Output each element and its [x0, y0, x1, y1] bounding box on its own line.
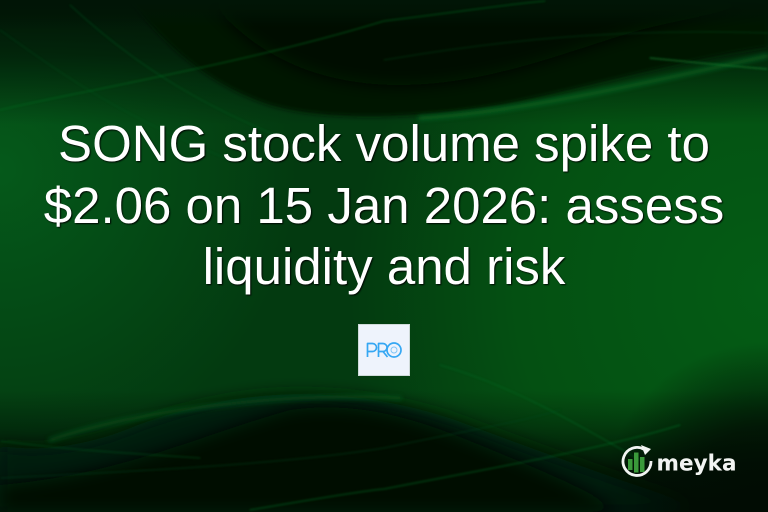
title [44, 115, 724, 296]
title: $2.06 on 15 Jan 2026: assess [44, 176, 724, 234]
icon: circular arrow with bars [623, 445, 651, 475]
title: SONG stock volume spike to [58, 115, 710, 172]
icon: PRO company logo [358, 324, 410, 376]
wordmark: meyka [656, 452, 736, 476]
logo: meyka [622, 445, 736, 477]
title: liquidity and risk [203, 238, 565, 295]
